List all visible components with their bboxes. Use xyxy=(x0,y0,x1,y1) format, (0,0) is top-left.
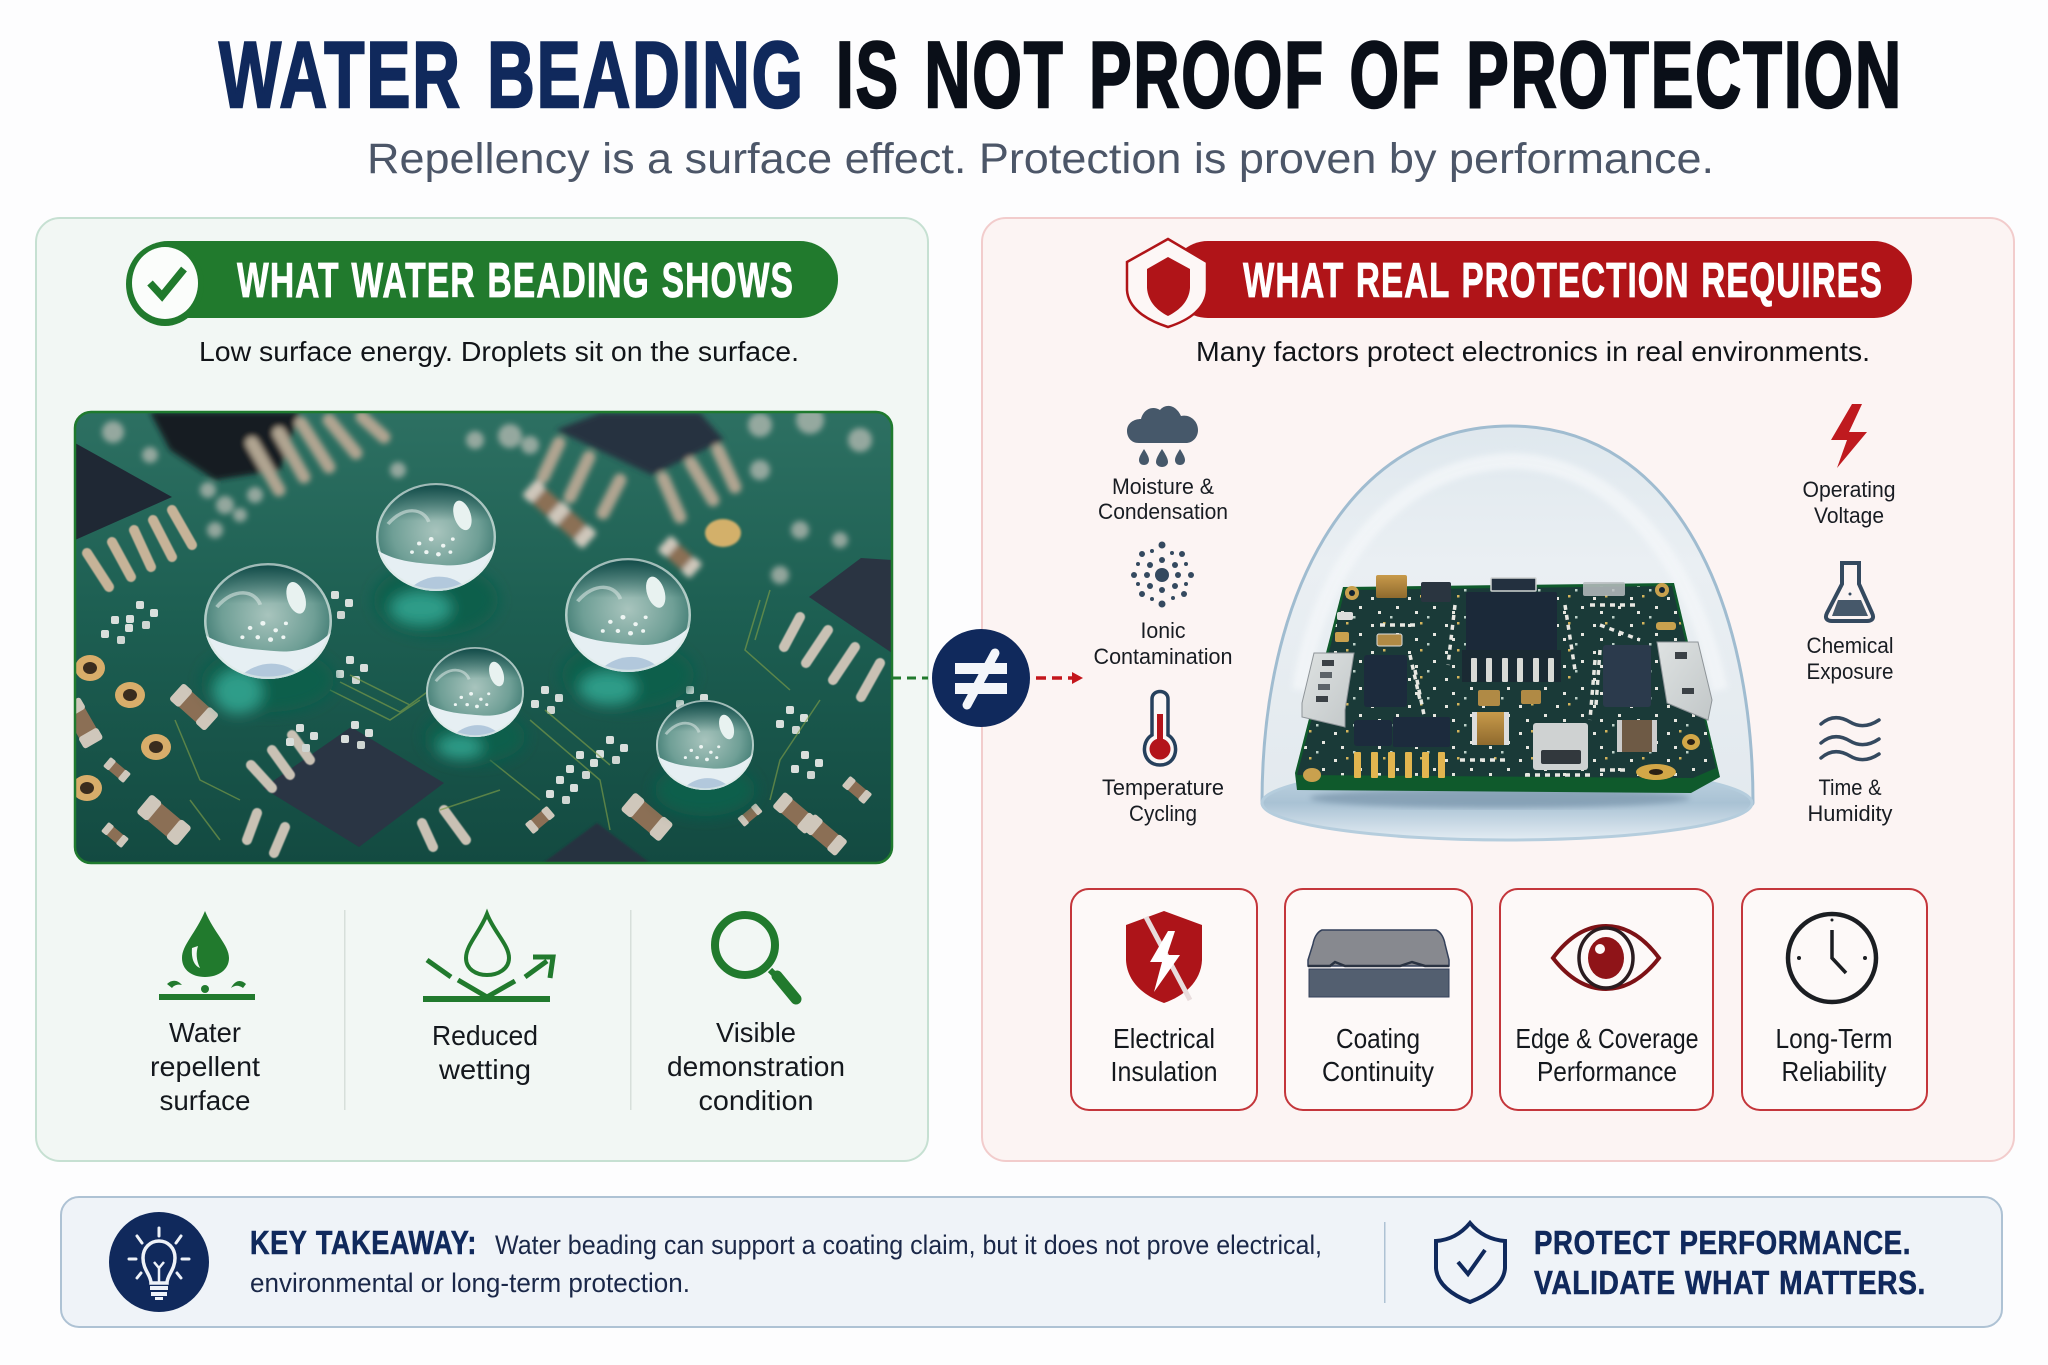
icon: shield check xyxy=(1436,1223,1505,1302)
label: electrical insulation: Electrical xyxy=(1113,1023,1215,1054)
board xyxy=(1295,583,1720,793)
panel: key takeaway xyxy=(61,1197,2002,1327)
label: chemical exposure: Chemical xyxy=(1806,633,1894,658)
icon: coated layer xyxy=(1308,930,1449,997)
label: long-term reliability: Reliability xyxy=(1782,1056,1886,1087)
label: water repellent surface: repellent xyxy=(150,1051,260,1082)
heading pill: real protection xyxy=(1127,239,1912,327)
heading pill: water beading: WHAT WATER BEADING SHOWS xyxy=(237,254,794,308)
label: time and humidity: Humidity xyxy=(1808,801,1893,826)
label: temperature cycling: Temperature xyxy=(1102,775,1224,800)
connectors xyxy=(1302,653,1354,727)
label: moisture: Moisture & xyxy=(1112,474,1214,499)
panel: what real protection requires xyxy=(982,218,2014,1161)
call to action xyxy=(1534,1224,1926,1301)
label: temperature cycling xyxy=(1102,775,1224,826)
title xyxy=(219,22,1903,127)
tiny parts xyxy=(101,616,133,644)
label: coating continuity: Continuity xyxy=(1322,1056,1434,1087)
label: operating voltage xyxy=(1802,477,1896,528)
label: ionic contamination: Ionic xyxy=(1140,618,1186,643)
icon: moisture cloud xyxy=(1127,406,1198,467)
subtitle: Repellency is a surface effect. Protection is proven by performance. xyxy=(367,135,1714,183)
card: electrical insulation xyxy=(1071,889,1257,1110)
icon: eye xyxy=(1553,926,1659,989)
takeaway text: environmental or long-term protection. xyxy=(250,1268,690,1298)
label: water repellent surface: Water xyxy=(169,1017,241,1048)
takeaway text: KEY TAKEAWAY: xyxy=(250,1224,477,1261)
label: visible demonstration condition: demonstration xyxy=(667,1051,845,1082)
label: water repellent surface: surface xyxy=(160,1085,250,1116)
label: ionic contamination xyxy=(1094,618,1232,669)
label: operating voltage: Operating xyxy=(1802,477,1896,502)
label: time and humidity: Time & xyxy=(1818,775,1882,800)
label: visible demonstration condition xyxy=(667,1017,845,1116)
label: time and humidity xyxy=(1808,775,1893,826)
capacitors xyxy=(1376,575,1407,598)
icon: flask xyxy=(1826,563,1873,621)
icon: cracked shield xyxy=(1126,911,1202,1003)
label: visible demonstration condition: Visible xyxy=(716,1017,796,1048)
icon: magnifier xyxy=(715,915,796,999)
arrow: red dashed xyxy=(1036,672,1083,684)
label: chemical exposure xyxy=(1806,633,1894,684)
icon: lightning bolt xyxy=(1831,404,1867,468)
blurred background xyxy=(102,406,872,584)
label: reduced wetting: Reduced xyxy=(432,1020,538,1051)
label: edge and coverage performance: Performance xyxy=(1537,1056,1677,1087)
solder rows xyxy=(1380,605,1640,775)
card: coating continuity xyxy=(1285,889,1472,1110)
chip pins xyxy=(87,510,192,587)
label: moisture xyxy=(1098,474,1228,524)
label: moisture: Condensation xyxy=(1098,499,1228,524)
panel: what water beading shows xyxy=(36,218,928,1161)
label: long-term reliability xyxy=(1776,1023,1892,1087)
icon: thermometer xyxy=(1144,692,1176,765)
icon: reduced wetting xyxy=(423,914,553,1002)
label: reduced wetting xyxy=(432,1020,538,1085)
photo: circuit board with water droplets xyxy=(60,406,892,863)
icon: ionic particles xyxy=(1131,542,1194,608)
illustration: circuit board under glass dome xyxy=(1262,426,1753,840)
label: edge and coverage performance: Edge & Coverage xyxy=(1516,1023,1698,1054)
title: WATER BEADING xyxy=(219,22,805,127)
label: operating voltage: Voltage xyxy=(1814,503,1884,528)
panel description: Many factors protect electronics in real environments. xyxy=(1196,336,1870,367)
not-equal badge xyxy=(932,629,1030,727)
label: long-term reliability: Long-Term xyxy=(1776,1023,1892,1054)
copper traces xyxy=(175,590,820,840)
icon: light bulb xyxy=(109,1212,209,1312)
card: long-term reliability xyxy=(1742,889,1927,1110)
surface components xyxy=(169,683,219,731)
heading pill: water beading xyxy=(126,241,838,326)
label: electrical insulation: Insulation xyxy=(1110,1056,1218,1087)
icon: waves xyxy=(1821,718,1879,760)
call to action: VALIDATE WHAT MATTERS. xyxy=(1534,1264,1926,1301)
connector: green dashes xyxy=(892,676,928,680)
icon: water repellent surface xyxy=(159,911,255,1000)
gold pads xyxy=(75,655,105,681)
label: coating continuity xyxy=(1322,1023,1434,1087)
label: reduced wetting: wetting xyxy=(438,1054,531,1085)
panel description: Low surface energy. Droplets sit on the surface. xyxy=(199,336,799,367)
takeaway text: Water beading can support a coating claim, but it does not prove electrical, xyxy=(495,1230,1322,1260)
call to action: PROTECT PERFORMANCE. xyxy=(1534,1224,1911,1261)
takeaway text xyxy=(250,1224,1322,1298)
card: edge and coverage performance xyxy=(1500,889,1713,1110)
water droplets xyxy=(204,563,332,679)
label: chemical exposure: Exposure xyxy=(1806,659,1894,684)
droplet halos xyxy=(202,564,755,816)
label: water repellent surface xyxy=(150,1017,260,1116)
label: edge and coverage performance xyxy=(1516,1023,1698,1087)
label: ionic contamination: Contamination xyxy=(1094,644,1232,669)
label: visible demonstration condition: condition xyxy=(698,1085,814,1116)
icon: clock xyxy=(1788,914,1876,1002)
chips xyxy=(1466,592,1557,652)
chips xyxy=(75,443,172,540)
label: electrical insulation xyxy=(1110,1023,1218,1087)
label: coating continuity: Coating xyxy=(1336,1023,1420,1054)
label: temperature cycling: Cycling xyxy=(1129,801,1197,826)
